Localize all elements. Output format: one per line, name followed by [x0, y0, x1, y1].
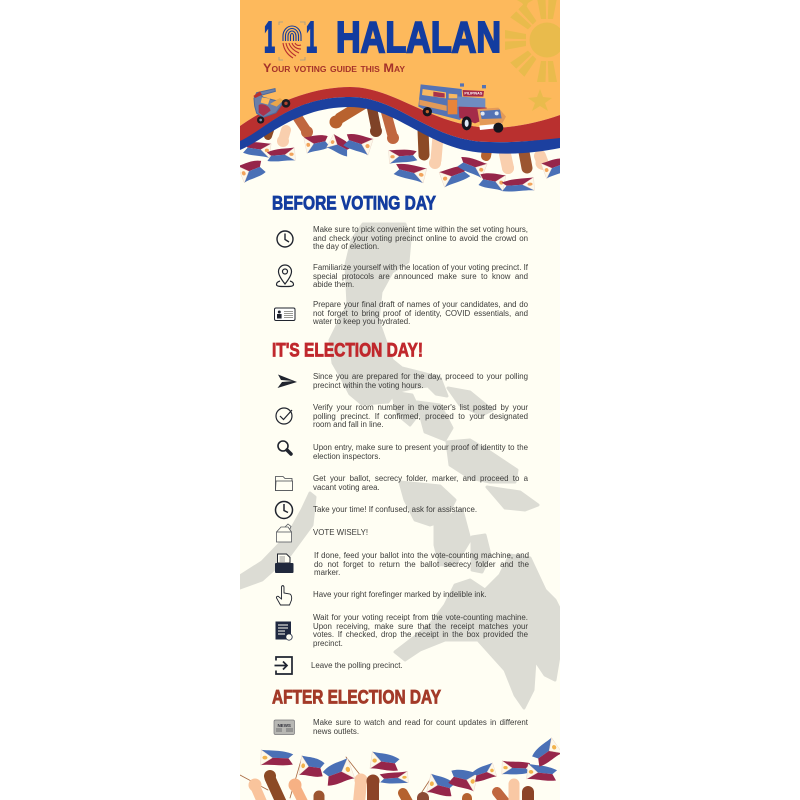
icon: sun: [505, 0, 564, 82]
text: wait for receipt: Upon receiving, make sure that the receipt matches your: [313, 622, 528, 631]
text: watch count updates: news outlets.: [313, 727, 359, 736]
title: 101 Halalan: 1: [306, 13, 317, 62]
icon: jeepney: PILIPINAS: [464, 92, 483, 96]
icon: tray with document: [275, 554, 294, 573]
text: verify room number: polling precinct. If confirmed, proceed to your designated: [313, 412, 528, 421]
top flags: [240, 134, 560, 192]
icon: jeepney: [418, 83, 506, 133]
panel: orange header: [240, 0, 560, 128]
heading: after election day: AFTER ELECTION DAY: [272, 688, 441, 708]
text: watch count updates: [313, 718, 528, 736]
text: get your ballot: Get your ballot, secrecy folder, marker, and proceed to a: [313, 474, 528, 483]
icon: receipt document: [276, 622, 292, 640]
text: prepare final draft: not forget to bring proof of identity, COVID essentials, and: [313, 309, 528, 318]
text: present proof of identity: Upon entry, make sure to present your proof of identity to the: [313, 443, 528, 452]
icon: small star cut off at top: [518, 0, 532, 6]
text: verify room number: [313, 403, 528, 429]
text: proceed to polling precinct: precinct within the voting hours.: [313, 381, 424, 390]
text: wait for receipt: precinct.: [313, 639, 343, 648]
text: leave the precinct: Leave the polling precinct.: [311, 661, 403, 670]
wave: blue band: [240, 97, 560, 154]
text: get your ballot: [313, 474, 528, 492]
icon: pointing hand: [276, 586, 292, 605]
icon: paper plane: [278, 374, 297, 388]
wave: red band: [240, 87, 560, 142]
heading: before voting day: BEFORE VOTING DAY: [272, 194, 436, 214]
text: feed your ballot: [314, 551, 529, 577]
text: wait for receipt: votes. If checked, drop the receipt in the box provided the: [313, 630, 528, 639]
text: familiarize with location: [313, 263, 528, 289]
text: familiarize with location: Familiarize yourself with the location of your voting precinct. If: [313, 263, 528, 272]
icon: clock: [276, 502, 292, 518]
text: familiarize with location: special protocols are announced make sure to know and: [313, 272, 528, 281]
text: verify room number: Verify your room number in the voter's list posted by your: [313, 403, 528, 412]
icon: tricycle: [253, 89, 290, 124]
text: present proof of identity: [313, 443, 528, 461]
text: prepare final draft: Prepare your final draft of names of your candidates, and do: [313, 300, 528, 309]
text: pick convenient time: the day of election.: [313, 242, 379, 251]
icon: newspaper: [274, 720, 294, 734]
text: watch count updates: Make sure to watch and read for count updates in different: [313, 718, 528, 727]
icon: folder: [276, 476, 292, 490]
text: take your time: Take your time! If confused, ask for assistance.: [313, 505, 477, 514]
text: get your ballot: vacant voting area.: [313, 483, 380, 492]
icon: fingerprint forming the zero: [279, 22, 305, 60]
text: forefinger marked: Have your right forefinger marked by indelible ink.: [313, 590, 487, 599]
text: wait for receipt: Wait for your voting receipt from the vote-counting machine.: [313, 613, 528, 622]
text: present proof of identity: election inspectors.: [313, 452, 381, 461]
bottom flags: [261, 738, 562, 798]
top arms and fists behind the wave: [268, 104, 548, 174]
map of the Philippines watermark: [240, 224, 560, 708]
text: familiarize with location: abide them.: [313, 280, 354, 289]
text: pick convenient time: Make sure to pick convenient time within the set voting hours,: [313, 225, 528, 234]
icon: check circle: [276, 408, 292, 424]
title: 101 Halalan: 1: [264, 13, 275, 62]
icon: newspaper: NEWS: [277, 723, 291, 728]
text: wait for receipt: [313, 613, 528, 648]
panel: cream background: [240, 107, 560, 800]
heading: election day: IT'S ELECTION DAY!: [272, 340, 423, 362]
text: prepare final draft: [313, 300, 528, 326]
icon: ID card: [274, 308, 295, 320]
text: feed your ballot: do not forget to return the ballot secrecy folder and the: [314, 560, 529, 569]
text: prepare final draft: water to keep you hydrated.: [313, 317, 410, 326]
text: verify room number: room and fall in line.: [313, 420, 384, 429]
icon: location pin: [276, 265, 294, 286]
icon: clock: [277, 231, 293, 247]
icon: magnifier: [278, 441, 291, 454]
title: 101 Halalan: [264, 21, 500, 60]
text: feed your ballot: If done, feed your ballot into the vote-counting machine, and: [314, 551, 529, 560]
text: vote wisely: VOTE WISELY!: [313, 528, 368, 537]
text: pick convenient time: [313, 225, 528, 251]
subtitle: Your voting guide this May: [263, 61, 406, 75]
bottom arms and hands: [240, 757, 528, 800]
icon: exit arrow: [274, 657, 292, 674]
text: proceed to polling precinct: [313, 372, 528, 390]
text: proceed to polling precinct: Since you are prepared for the day, proceed to your polling: [313, 372, 528, 381]
icon: star: [528, 89, 552, 111]
text: feed your ballot: marker.: [314, 568, 340, 577]
title: 101 Halalan: HALALAN: [336, 13, 501, 62]
icon: ballot box: [276, 524, 292, 542]
text: pick convenient time: and check your voting precinct online to avoid the crowd on: [313, 234, 528, 243]
